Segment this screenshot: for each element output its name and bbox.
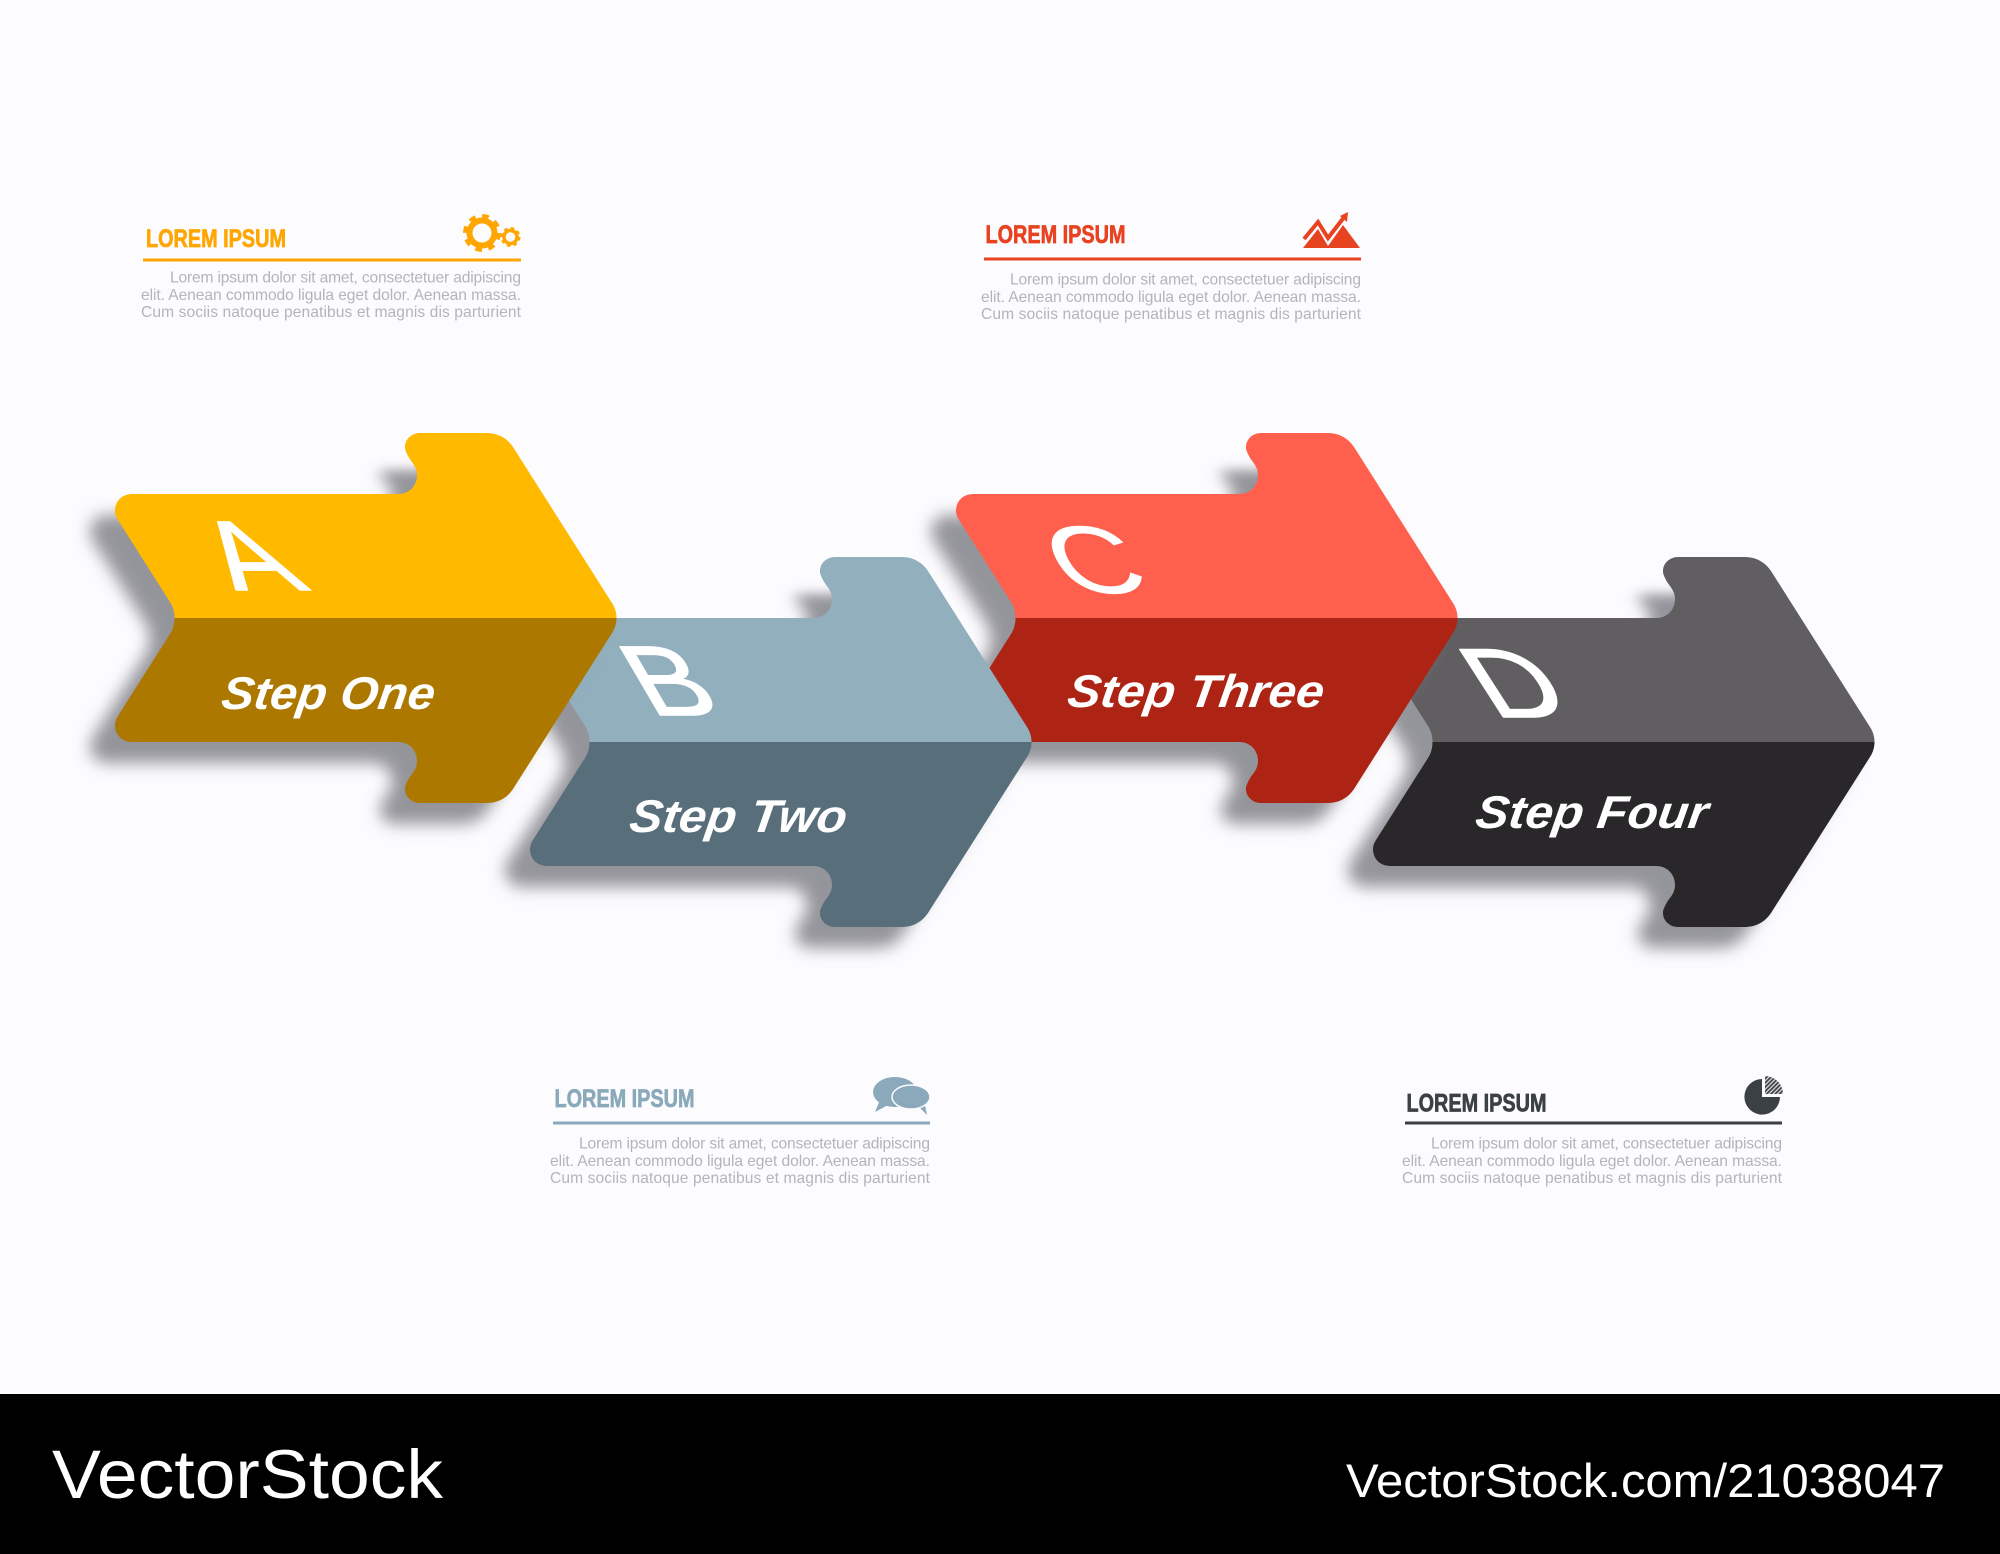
arrow C body xyxy=(956,433,1458,803)
text block: step C: Cum sociis natoque penatibus et magnis dis parturient xyxy=(981,306,1362,323)
icon: rising chart over mountains xyxy=(1303,212,1360,248)
heading: step A: LOREM IPSUM xyxy=(146,225,286,253)
label: Step Three: Step Three xyxy=(1065,665,1328,717)
panel: step D description xyxy=(1402,1076,1783,1187)
arrow D shadow xyxy=(1348,549,1850,948)
divider: step C xyxy=(984,258,1361,260)
arrow C shadow xyxy=(931,425,1432,824)
arrow A shadow xyxy=(90,425,592,824)
text block: step D: Lorem ipsum dolor sit amet, consectetuer adipiscing xyxy=(1431,1136,1782,1152)
letter C: C xyxy=(1023,507,1166,614)
panel: step A description xyxy=(141,216,522,321)
label: Step Four: Step Four xyxy=(1473,786,1715,838)
footer image reference: VectorStock.com/21038047 xyxy=(1346,1455,1945,1508)
divider: step A xyxy=(143,258,521,262)
text block: step D: Cum sociis natoque penatibus et magnis dis parturient xyxy=(1402,1170,1783,1187)
text block: step B: Cum sociis natoque penatibus et magnis dis parturient xyxy=(550,1170,931,1187)
arrow B xyxy=(505,549,1032,948)
text block: step B: elit. Aenean commodo ligula eget dolor. Aenean massa. xyxy=(550,1153,930,1170)
arrow D xyxy=(1348,549,1874,948)
text block: step C xyxy=(981,272,1362,323)
footer brand: VectorStock xyxy=(52,1436,444,1513)
text block: step A: elit. Aenean commodo ligula eget dolor. Aenean massa. xyxy=(141,287,521,304)
arrow D body xyxy=(1373,557,1874,927)
icon: speech bubbles xyxy=(873,1077,930,1115)
footer bar xyxy=(0,1394,2000,1554)
divider: step D xyxy=(1405,1122,1782,1124)
panel: step C description xyxy=(981,212,1362,323)
text block: step D xyxy=(1402,1136,1783,1187)
arrow B body xyxy=(530,557,1032,927)
heading: step B: LOREM IPSUM xyxy=(554,1085,694,1113)
text block: step C: elit. Aenean commodo ligula eget dolor. Aenean massa. xyxy=(981,289,1361,306)
letter D: D xyxy=(1437,628,1591,738)
text block: step D: elit. Aenean commodo ligula eget dolor. Aenean massa. xyxy=(1402,1153,1782,1170)
label: Step Two: Step Two xyxy=(627,790,851,842)
text block: step C: Lorem ipsum dolor sit amet, consectetuer adipiscing xyxy=(1010,272,1361,288)
text block: step A xyxy=(141,270,522,321)
heading: step D: LOREM IPSUM xyxy=(1406,1090,1546,1118)
arrow A xyxy=(90,425,616,824)
label: Step One: Step One xyxy=(219,667,439,719)
letter A: A xyxy=(171,501,327,611)
arrow C xyxy=(931,425,1458,824)
heading: step C: LOREM IPSUM xyxy=(986,221,1126,249)
text block: step A: Lorem ipsum dolor sit amet, consectetuer adipiscing xyxy=(170,270,521,286)
letter B: B xyxy=(599,626,738,737)
divider: step B xyxy=(553,1122,930,1124)
icon: pie chart xyxy=(1744,1076,1783,1115)
text block: step A: Cum sociis natoque penatibus et magnis dis parturient xyxy=(141,304,522,321)
text block: step B xyxy=(550,1136,931,1187)
arrow B shadow xyxy=(505,549,1006,948)
panel: step B description xyxy=(550,1077,931,1187)
arrow A body xyxy=(115,433,616,803)
text block: step B: Lorem ipsum dolor sit amet, consectetuer adipiscing xyxy=(579,1136,930,1152)
icon: gears xyxy=(466,216,519,250)
